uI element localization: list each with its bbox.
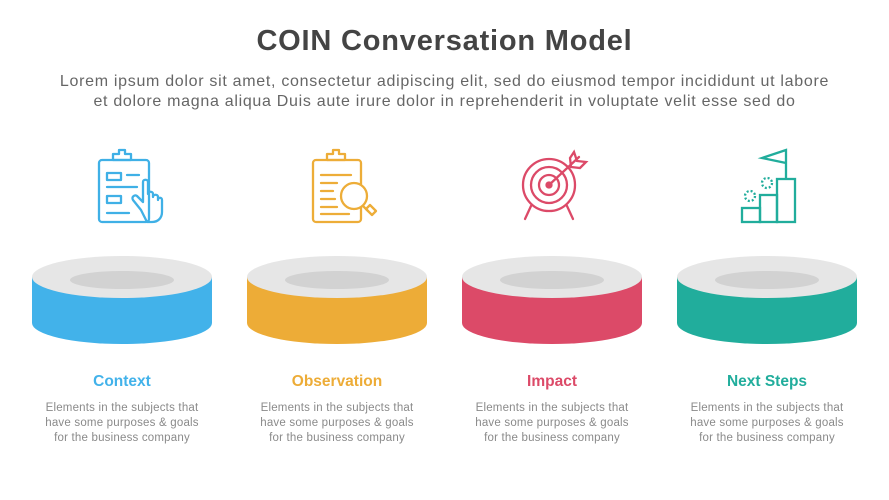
text: context: for the business company xyxy=(54,432,190,444)
text: context: Elements in the subjects that xyxy=(46,402,198,414)
text: next steps: Next Steps xyxy=(727,373,807,390)
text: observation: Elements in the subjects that xyxy=(261,402,413,414)
text: observation: for the business company xyxy=(269,432,405,444)
text: impact: for the business company xyxy=(484,432,620,444)
subtitle: Lorem ipsum dolor sit amet, consectetur adipiscing elit, sed do eiusmod tempor incididunt ut labore xyxy=(60,73,829,90)
text: next steps: Elements in the subjects that xyxy=(691,402,843,414)
text: context: have some purposes & goals xyxy=(45,417,199,429)
cylinder: observation xyxy=(247,256,427,344)
text: observation: Observation xyxy=(292,373,382,390)
cylinder: next steps xyxy=(677,256,857,344)
text: impact xyxy=(475,373,629,444)
text: impact: have some purposes & goals xyxy=(475,417,629,429)
title: COIN Conversation Model xyxy=(256,25,633,57)
text: next steps xyxy=(690,373,844,444)
subtitle xyxy=(60,73,829,110)
text: observation xyxy=(260,373,414,444)
text: observation: have some purposes & goals xyxy=(260,417,414,429)
icon: clipboard hand xyxy=(99,150,162,222)
text: impact: Elements in the subjects that xyxy=(476,402,628,414)
cylinder: impact xyxy=(462,256,642,344)
text: context: Context xyxy=(93,373,151,390)
text: impact: Impact xyxy=(527,373,577,390)
text: next steps: for the business company xyxy=(699,432,835,444)
icon: steps flag xyxy=(742,150,795,222)
icon: clipboard magnifier xyxy=(313,150,376,222)
text: next steps: have some purposes & goals xyxy=(690,417,844,429)
icon: target xyxy=(523,152,586,219)
cylinder: context xyxy=(32,256,212,344)
text: context xyxy=(45,373,199,444)
subtitle: et dolore magna aliqua Duis aute irure dolor in reprehenderit in voluptate velit esse sed do xyxy=(93,93,796,110)
